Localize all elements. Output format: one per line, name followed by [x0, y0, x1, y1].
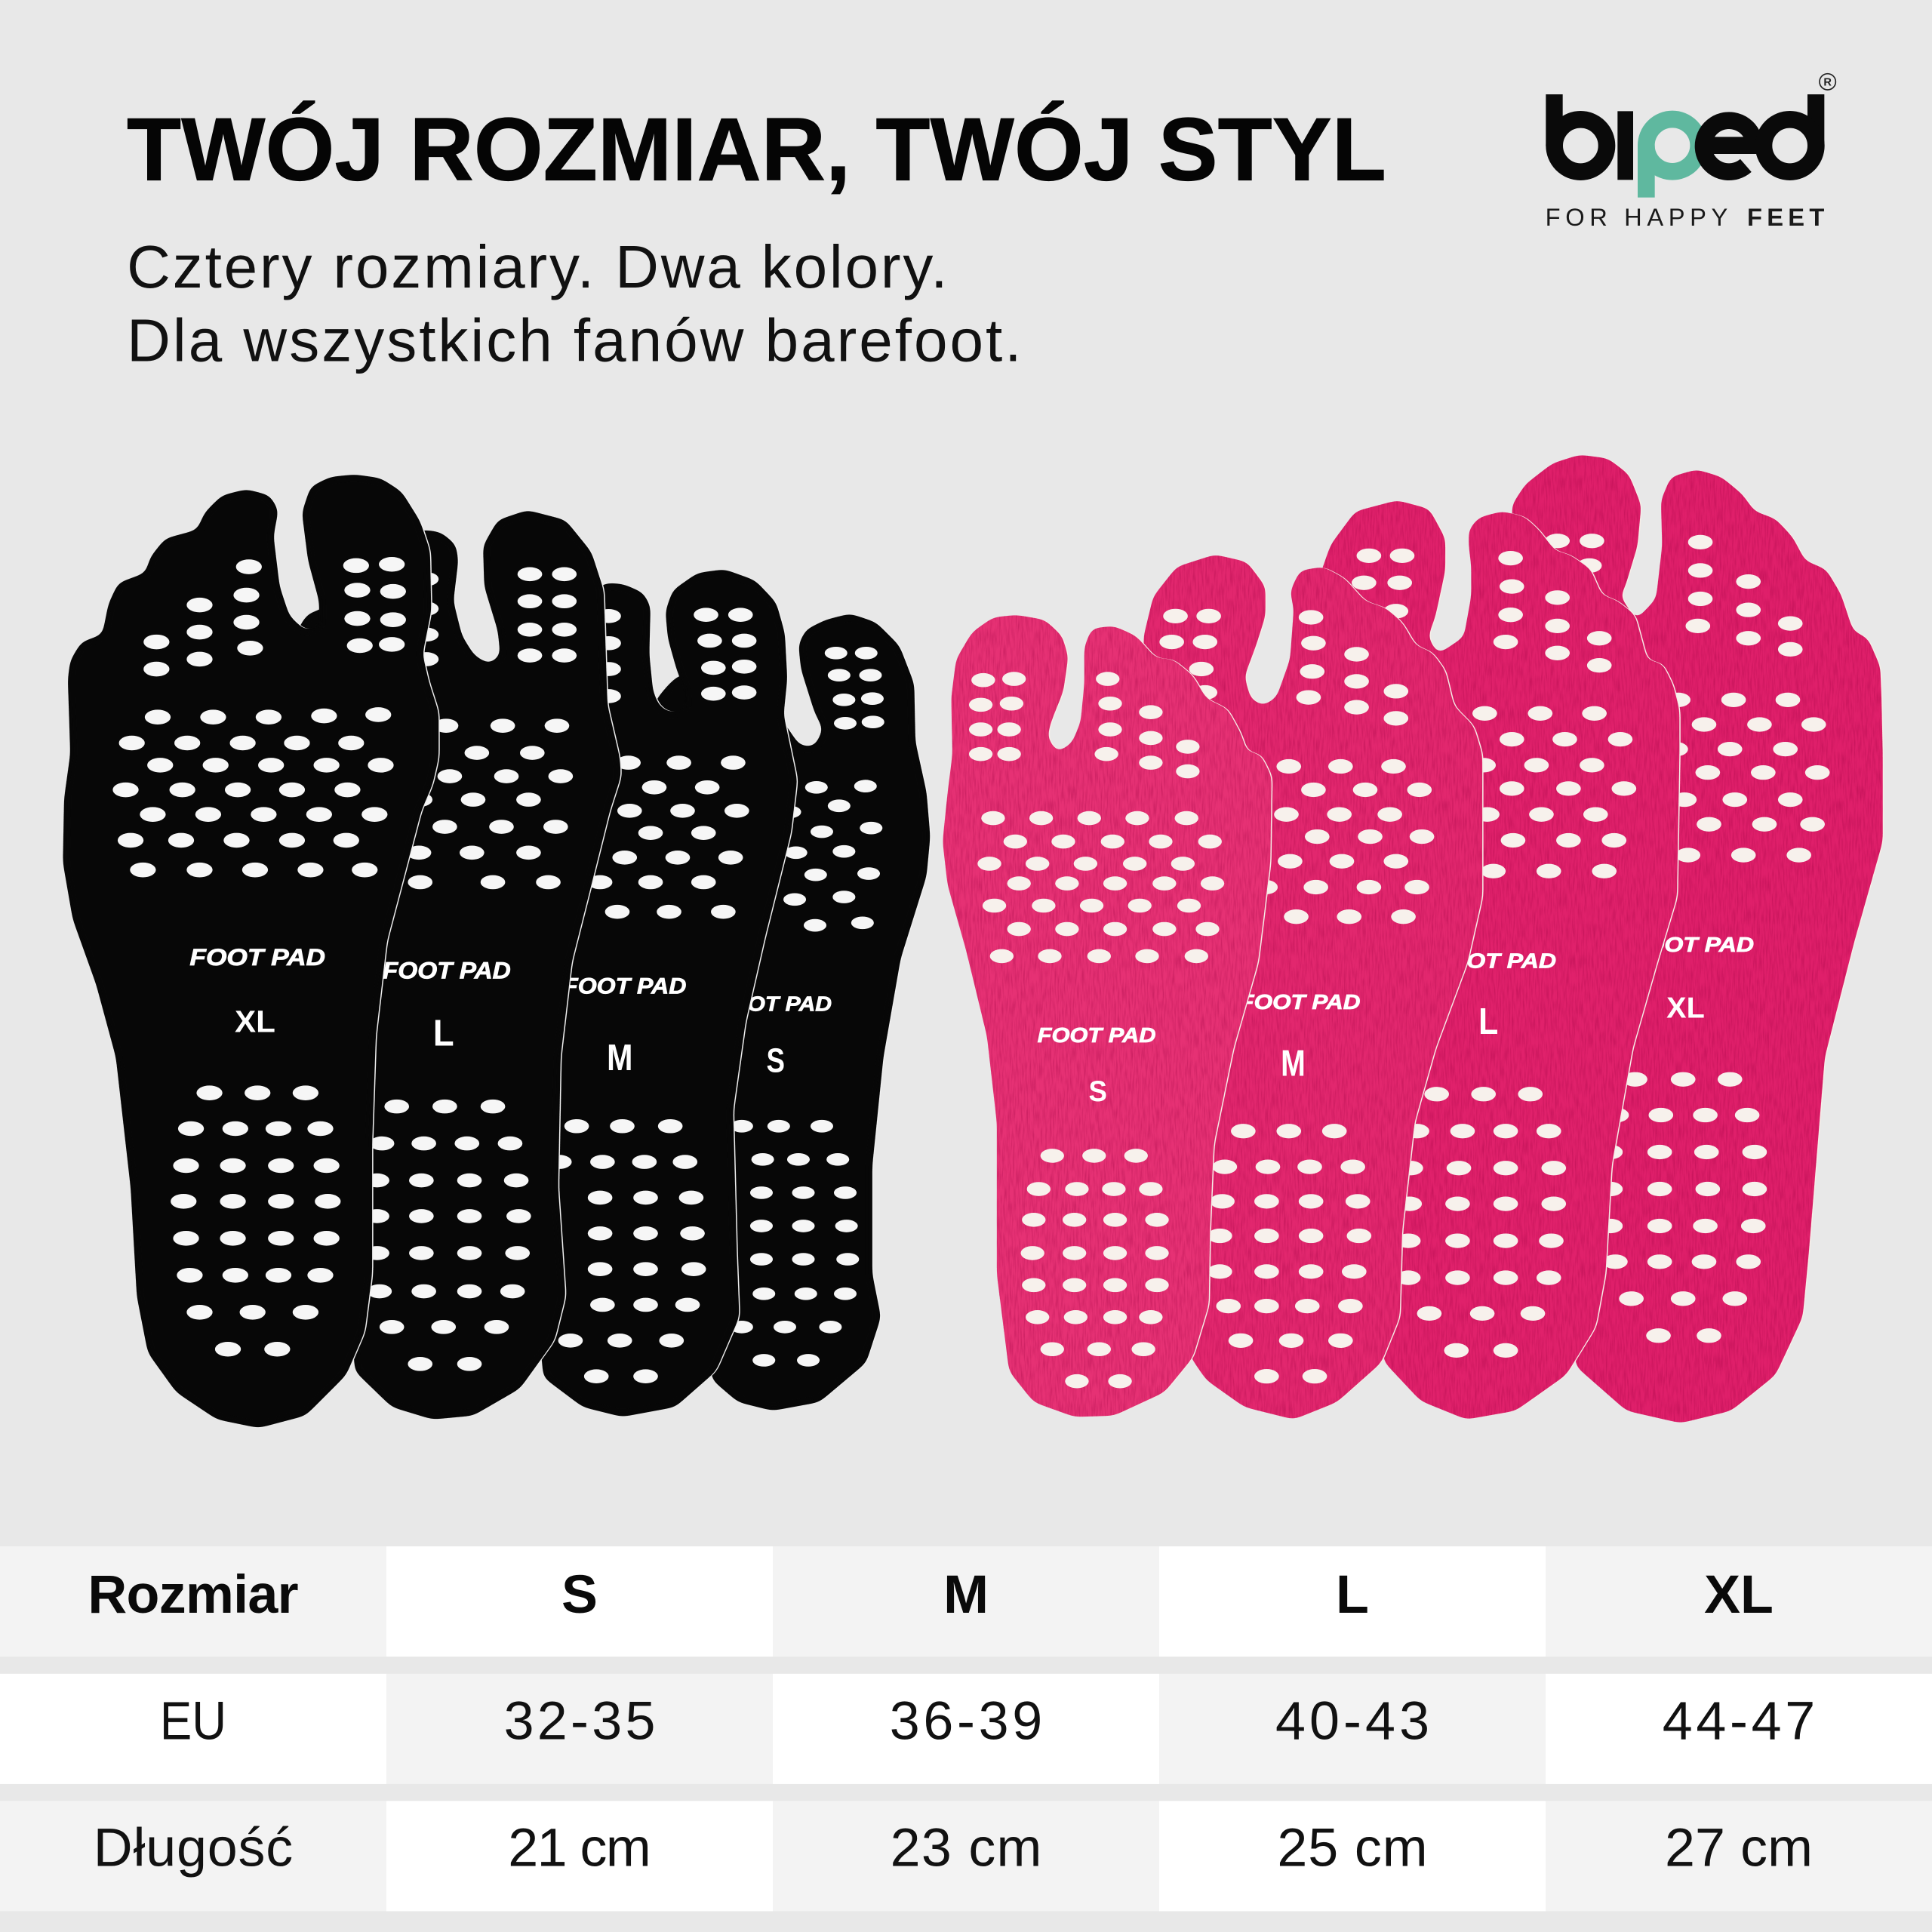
- table row: Rozmiar: [0, 1546, 1932, 1657]
- size label S: S: [767, 1041, 785, 1079]
- table row: Długość: 25 cm: [1277, 1818, 1428, 1878]
- table row: Długość: 27 cm: [1665, 1818, 1813, 1878]
- size label L: L: [1478, 1001, 1498, 1042]
- table row: Długość: 23 cm: [891, 1818, 1041, 1878]
- title: TWÓJ ROZMIAR, TWÓJ STYL: [127, 100, 1386, 198]
- logo: biped: [1546, 74, 1835, 231]
- logo tagline: FOR HAPPY: [1546, 203, 1728, 231]
- black foot pad XL: [63, 475, 438, 1428]
- logo letter e: [1703, 121, 1755, 172]
- table row: Rozmiar: L: [1336, 1564, 1369, 1625]
- registered mark: [1820, 74, 1835, 90]
- foot pad print: FOOT PAD: [563, 974, 686, 999]
- foot pad print: FOOT PAD: [716, 992, 832, 1016]
- logo letter b: [1546, 94, 1607, 172]
- table row: EU: EU: [160, 1690, 226, 1751]
- size table: [0, 1546, 1932, 1911]
- table row: Rozmiar: XL: [1704, 1564, 1774, 1625]
- foot pads: black set: [63, 475, 931, 1428]
- pink foot pad M: [1143, 555, 1482, 1420]
- foot pad print: FOOT PAD: [1038, 1023, 1155, 1047]
- table row: EU: 40-43: [1275, 1690, 1429, 1751]
- subtitle: Dla wszystkich fanów barefoot.: [127, 306, 1021, 374]
- size label S: S: [1088, 1075, 1107, 1108]
- black foot pad M: [530, 569, 797, 1417]
- size label XL: XL: [235, 1004, 275, 1038]
- table row: Długość: Długość: [94, 1818, 293, 1878]
- foot pads: pink set: [943, 454, 1883, 1423]
- subtitle: [127, 233, 1021, 374]
- foot pad print: FOOT PAD: [189, 944, 325, 971]
- foot pad print: FOOT PAD: [383, 957, 511, 983]
- logo tagline: FEET: [1747, 203, 1824, 231]
- size label M: M: [1281, 1043, 1306, 1084]
- foot pad print: FOOT PAD: [1631, 933, 1754, 956]
- foot pad print: FOOT PAD: [1239, 990, 1360, 1014]
- registered mark: R: [1823, 77, 1832, 89]
- table row: EU: 32-35: [504, 1690, 655, 1751]
- pink foot pad XL: [1512, 454, 1883, 1423]
- black foot pad L: [296, 510, 621, 1420]
- pink foot pad L: [1306, 500, 1679, 1420]
- logo letter p: [1638, 119, 1699, 198]
- logo tagline: [1546, 203, 1824, 231]
- size label M: M: [607, 1038, 632, 1078]
- table row: EU: [0, 1674, 1932, 1784]
- pink foot pad S: [943, 615, 1272, 1417]
- table row: Długość: [0, 1801, 1932, 1911]
- table row: EU: 36-39: [890, 1690, 1042, 1751]
- size label XL: XL: [1666, 992, 1705, 1025]
- table row: EU: 44-47: [1663, 1690, 1815, 1751]
- black foot pad S: [641, 614, 931, 1411]
- table row: Długość: 21 cm: [508, 1818, 651, 1878]
- table row: Rozmiar: Rozmiar: [88, 1564, 299, 1625]
- table row: Rozmiar: M: [943, 1564, 989, 1625]
- foot pad print: FOOT PAD: [1433, 949, 1556, 972]
- subtitle: Cztery rozmiary. Dwa kolory.: [127, 233, 948, 300]
- logo letter d: [1764, 94, 1824, 172]
- size label L: L: [433, 1013, 454, 1054]
- table row: Rozmiar: S: [561, 1564, 598, 1625]
- logo letter i: [1617, 111, 1633, 180]
